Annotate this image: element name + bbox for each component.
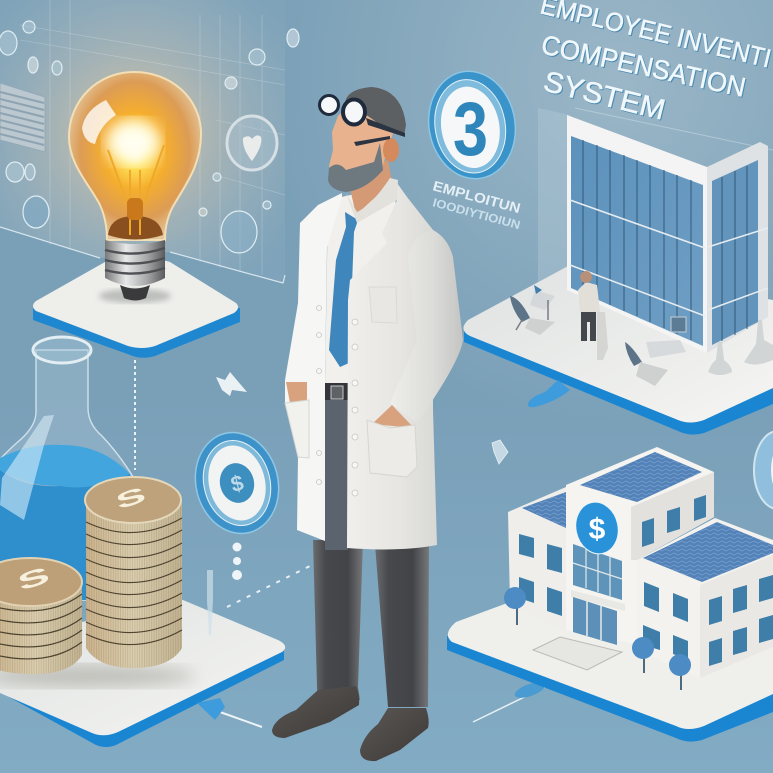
caption: employee invention label: EMPLOITUN <box>431 177 522 216</box>
coat left front <box>285 193 342 541</box>
bank trees <box>504 587 691 690</box>
title <box>538 0 773 127</box>
building front <box>567 115 707 353</box>
right block <box>637 518 773 678</box>
title: SYSTEM <box>540 66 668 127</box>
caption: employee invention label <box>431 177 522 232</box>
icon: heart bubble <box>227 116 277 170</box>
icon: small bubbles <box>0 21 299 253</box>
tie <box>329 212 358 367</box>
coin dollar sign: S <box>113 482 149 514</box>
bank dollar medallion <box>571 498 623 558</box>
right block roof <box>643 522 773 582</box>
panel: office platform <box>463 265 773 435</box>
left wing roof <box>522 492 566 528</box>
bank entrance <box>533 544 625 670</box>
badge: money disc: $ <box>228 470 246 497</box>
lamps <box>708 320 773 375</box>
left desk <box>510 285 555 335</box>
coat <box>285 183 463 549</box>
steps <box>533 637 622 670</box>
bank dollar medallion: $ <box>589 513 606 546</box>
face <box>329 104 394 190</box>
arrow: office platform <box>528 380 570 407</box>
beard <box>328 143 383 192</box>
icon: coin stack left <box>0 558 82 674</box>
left wing <box>508 487 566 632</box>
ear <box>383 138 399 162</box>
icon: lightbulb <box>69 72 201 300</box>
building: bank <box>504 447 773 690</box>
coat breast pocket <box>369 287 397 323</box>
icon: coin stack right <box>85 477 182 668</box>
goggles <box>320 96 405 146</box>
collar <box>346 178 398 223</box>
badge: money disc <box>185 424 289 542</box>
icon: dots <box>232 542 242 580</box>
title: COMPENSATION <box>539 30 748 103</box>
icon: drop <box>492 440 508 464</box>
connector: dashed line to figure <box>227 565 312 607</box>
center tower <box>566 447 714 645</box>
panel: lightbulb platform <box>33 260 240 358</box>
flask rim <box>33 337 91 363</box>
figure: inventor <box>272 87 463 761</box>
icon: striped card <box>0 83 45 152</box>
monitor <box>671 317 686 332</box>
panel: translucent idea screen <box>0 0 299 283</box>
tower roof <box>580 452 702 502</box>
icon: small vial <box>207 570 213 635</box>
bulb screw base <box>105 240 165 300</box>
building windows <box>571 136 758 346</box>
shoes <box>272 686 429 761</box>
right sleeve <box>390 230 463 423</box>
belt <box>325 383 348 400</box>
bank windows <box>519 495 773 666</box>
shirt <box>325 185 398 385</box>
panel: bank platform <box>447 602 773 742</box>
buttons <box>316 306 358 496</box>
right desk <box>625 340 686 386</box>
coin dollar sign: S <box>14 561 53 596</box>
hair <box>345 87 406 136</box>
arrow: bank platform <box>473 679 547 722</box>
left hand <box>286 382 307 403</box>
person <box>578 271 600 341</box>
badge: number 3 <box>420 64 524 186</box>
coat right front <box>347 183 437 549</box>
connector: dotted line under bulb <box>134 360 136 470</box>
left coat pocket <box>285 400 309 458</box>
right coat pocket <box>367 420 417 477</box>
icon: star fragment <box>216 372 247 396</box>
panel: coins platform <box>0 600 285 747</box>
badge: number 3: 3 <box>453 87 488 172</box>
badge: partial disc at right edge <box>754 431 773 509</box>
arrow: coins platform <box>197 698 262 727</box>
statue <box>597 312 608 360</box>
icon: glass flask <box>0 337 135 600</box>
right hand <box>372 405 414 428</box>
building: glass office <box>567 115 768 353</box>
legs <box>313 395 429 707</box>
caption: employee invention label: IOODIYTIOIUN <box>431 195 522 232</box>
icon: people and office furniture <box>510 271 773 386</box>
neck <box>347 160 392 215</box>
